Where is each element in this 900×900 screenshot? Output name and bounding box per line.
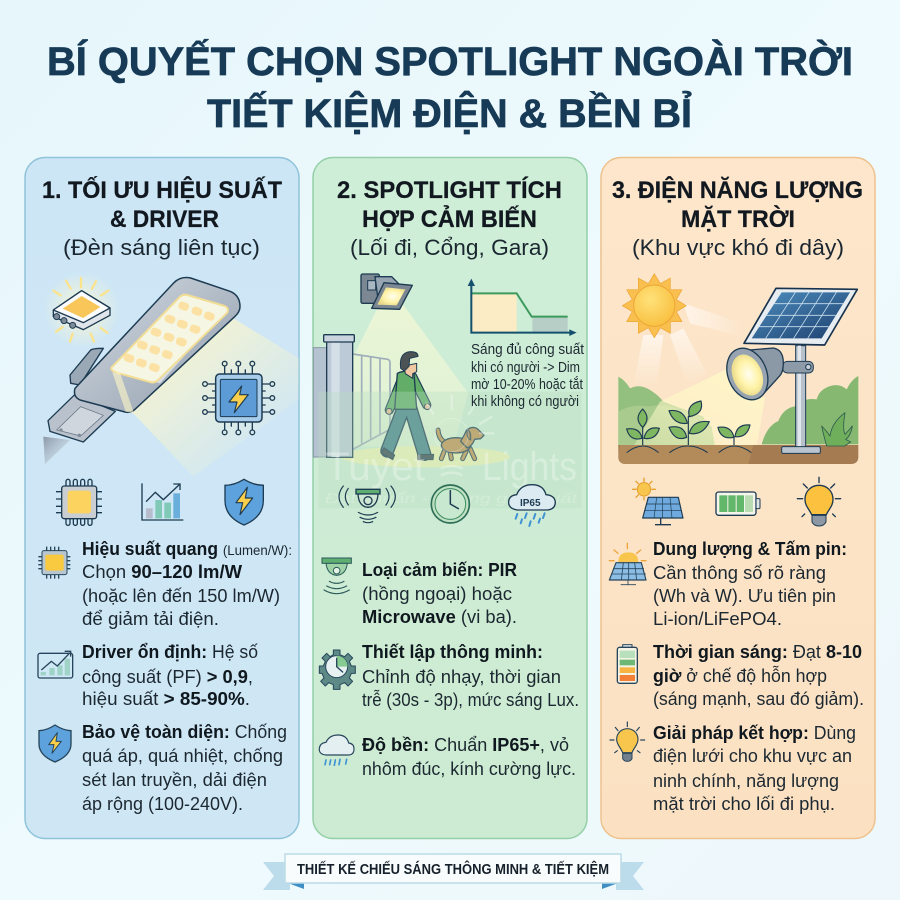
heading: section 2 bbox=[337, 176, 562, 260]
heading: section 2: (Lối đi, Cổng, Gara) bbox=[350, 235, 549, 260]
text: dimming note bbox=[471, 341, 585, 410]
icon: protection shield bbox=[225, 479, 263, 525]
heading: section 3: (Khu vực khó đi dây) bbox=[632, 235, 844, 260]
icon row: solar, battery, bulb bbox=[633, 477, 841, 526]
text: dimming note: Sáng đủ công suất bbox=[471, 341, 585, 358]
solar panel bbox=[744, 288, 857, 345]
list item: combined solution: Giải pháp kết hợp: Dùng bbox=[653, 722, 856, 743]
person walking bbox=[381, 352, 434, 460]
icon: solar panel with sun bbox=[633, 478, 683, 525]
chart: dimming profile bbox=[468, 279, 577, 336]
list item: luminous efficacy: để giảm tải điện. bbox=[82, 608, 219, 629]
list item: lighting time: Thời gian sáng: Đạt 8-10 bbox=[653, 641, 862, 662]
list item: smart settings: Thiết lập thông minh: bbox=[362, 641, 543, 662]
sun rays bbox=[633, 303, 743, 387]
icon: driver chip bbox=[203, 361, 275, 435]
icon: rain cloud bbox=[319, 735, 354, 765]
list item: combined solution bbox=[610, 722, 856, 814]
list item: capacity and panel bbox=[609, 538, 847, 629]
heading: section 2: 2. SPOTLIGHT TÍCH bbox=[337, 176, 562, 204]
light beam bbox=[353, 305, 468, 447]
semi-transparent watermark bbox=[318, 392, 582, 508]
lamp body bbox=[74, 278, 240, 412]
list item: combined solution: ninh chính, năng lượng bbox=[653, 770, 839, 791]
icon: IP65 cloud bbox=[509, 485, 555, 526]
list item: capacity and panel: Li-ion/LiFePO4. bbox=[653, 608, 782, 629]
heading: section 3 bbox=[612, 176, 863, 260]
icon: growth chart bbox=[142, 483, 183, 520]
spotlight beam bbox=[633, 367, 765, 447]
heading: section 3: 3. ĐIỆN NĂNG LƯỢNG bbox=[612, 176, 863, 204]
gate bbox=[313, 335, 390, 457]
ground light pool bbox=[340, 446, 510, 467]
icon: clock bbox=[431, 485, 469, 523]
garden bushes bbox=[618, 376, 858, 447]
list item: capacity and panel: (Wh và W). Ưu tiên pin bbox=[653, 585, 836, 606]
list item: smart settings: Chỉnh độ nhạy, thời gian bbox=[362, 666, 561, 687]
list item: lighting time: (sáng mạnh, sau đó giảm). bbox=[653, 688, 864, 709]
list item: full protection bbox=[39, 721, 287, 814]
list item: luminous efficacy: (hoặc lên đến 150 lm/W) bbox=[82, 585, 280, 606]
panel: orange solar bbox=[601, 158, 875, 838]
icon: shield small bbox=[39, 725, 71, 762]
list item: luminous efficacy: Hiệu suất quang (Lumen/W): bbox=[82, 538, 292, 559]
list item: durability: Độ bền: Chuẩn IP65+, vỏ bbox=[362, 734, 569, 755]
icon: LED module bbox=[56, 479, 102, 525]
list item: full protection: Bảo vệ toàn diện: Chống bbox=[82, 721, 287, 742]
list item: full protection: quá áp, quá nhiệt, chống bbox=[82, 745, 283, 766]
text: dimming note: mờ 10-20% hoặc tắt bbox=[471, 376, 584, 393]
illustration: solar spotlight garden bbox=[618, 274, 858, 464]
list item: sensor type: Loại cảm biến: PIR bbox=[362, 559, 517, 580]
icon: battery bbox=[716, 492, 760, 515]
list item: sensor type: Microwave (vi ba). bbox=[362, 606, 517, 627]
grass tuft bbox=[822, 413, 852, 446]
list item: luminous efficacy bbox=[38, 538, 292, 629]
illustration: motion sensor scene bbox=[313, 274, 582, 526]
heading: section 2: HỢP CẢM BIẾN bbox=[362, 204, 537, 233]
heading: section 1 bbox=[42, 176, 282, 260]
list item: stable driver bbox=[38, 641, 258, 709]
list item: combined solution: điện lưới cho khu vực an bbox=[653, 745, 852, 766]
list item: combined solution: mặt trời cho lối đi phụ. bbox=[653, 793, 835, 814]
title: TIẾT KIỆM ĐIỆN & BỀN BỈ bbox=[207, 90, 692, 136]
list item: capacity and panel: Cần thông số rõ ràng bbox=[653, 562, 826, 583]
icon: chip small bbox=[38, 547, 70, 579]
semi-transparent watermark: Lights bbox=[482, 445, 577, 489]
floodlight bbox=[361, 274, 412, 309]
list item: luminous efficacy: Chọn 90–120 lm/W bbox=[82, 561, 243, 582]
plants bbox=[627, 401, 751, 453]
icon: LED chip bbox=[43, 272, 120, 348]
soil bbox=[618, 445, 858, 464]
list item: sensor type bbox=[322, 558, 517, 627]
icon: battery vertical bbox=[617, 645, 637, 683]
list item: lighting time bbox=[617, 641, 864, 709]
panel background blue bbox=[25, 158, 299, 838]
list item: stable driver: Driver ổn định: Hệ số bbox=[82, 641, 258, 662]
heading: section 3: MẶT TRỜI bbox=[681, 205, 795, 233]
list item: smart settings bbox=[319, 641, 579, 710]
panel background orange bbox=[601, 158, 875, 838]
icon: light bulb bbox=[797, 477, 841, 526]
icon row: chip, chart, shield bbox=[56, 479, 263, 525]
list item: durability bbox=[319, 734, 576, 779]
list item: lighting time: giờ ở chế độ hỗn hợp bbox=[653, 665, 827, 686]
heading: section 1: & DRIVER bbox=[110, 206, 219, 233]
list item: full protection: sét lan truyền, dải điện bbox=[82, 769, 267, 790]
footer ribbon bbox=[263, 854, 644, 890]
icon: IP65 cloud: IP65 bbox=[520, 498, 541, 509]
text: dimming note: khi không có người bbox=[471, 393, 579, 410]
ribbon tails bbox=[263, 862, 644, 890]
list item: stable driver: hiệu suất > 85-90%. bbox=[82, 688, 250, 709]
list item: sensor type: (hồng ngoại) hoặc bbox=[362, 583, 512, 604]
heading: section 1: (Đèn sáng liên tục) bbox=[63, 235, 260, 260]
dog bbox=[438, 427, 484, 459]
list item: stable driver: công suất (PF) > 0,9, bbox=[82, 666, 253, 687]
lamp mount bbox=[48, 395, 115, 442]
sun bbox=[622, 274, 686, 338]
heading: section 1: 1. TỐI ƯU HIỆU SUẤT bbox=[42, 176, 282, 204]
list item: durability: nhôm đúc, kính cường lực. bbox=[362, 758, 576, 779]
semi-transparent watermark: Tuyet bbox=[325, 445, 425, 489]
icon: gear clock bbox=[319, 650, 355, 689]
icon: chart small bbox=[38, 651, 73, 678]
icon: sensor camera bbox=[339, 486, 395, 523]
footer ribbon: THIẾT KẾ CHIẾU SÁNG THÔNG MINH & TIẾT KIỆM bbox=[297, 860, 609, 878]
title: BÍ QUYẾT CHỌN SPOTLIGHT NGOÀI TRỜI bbox=[47, 38, 853, 84]
icon: bulb small bbox=[610, 722, 645, 761]
pole bbox=[782, 346, 820, 453]
list item: capacity and panel: Dung lượng & Tấm pin: bbox=[653, 538, 847, 559]
lamp pole bbox=[43, 437, 70, 464]
panel: green sensor bbox=[313, 158, 587, 838]
panel background green bbox=[313, 158, 587, 838]
text: dimming note: khi có người -> Dim bbox=[471, 359, 580, 376]
LED dots bbox=[123, 301, 216, 373]
icon: sensor small bbox=[322, 558, 351, 594]
illustration: street lamp bbox=[43, 272, 299, 477]
semi-transparent watermark: Đạt chuẩn - Không gian xuất bbox=[325, 490, 579, 506]
icon: solar small bbox=[609, 543, 646, 585]
list item: full protection: áp rộng (100-240V). bbox=[82, 793, 243, 814]
panel: blue efficiency bbox=[25, 158, 299, 838]
spotlight head bbox=[719, 342, 783, 406]
list item: smart settings: trễ (30s - 3p), mức sáng Lux. bbox=[362, 689, 579, 710]
title bbox=[47, 38, 853, 136]
